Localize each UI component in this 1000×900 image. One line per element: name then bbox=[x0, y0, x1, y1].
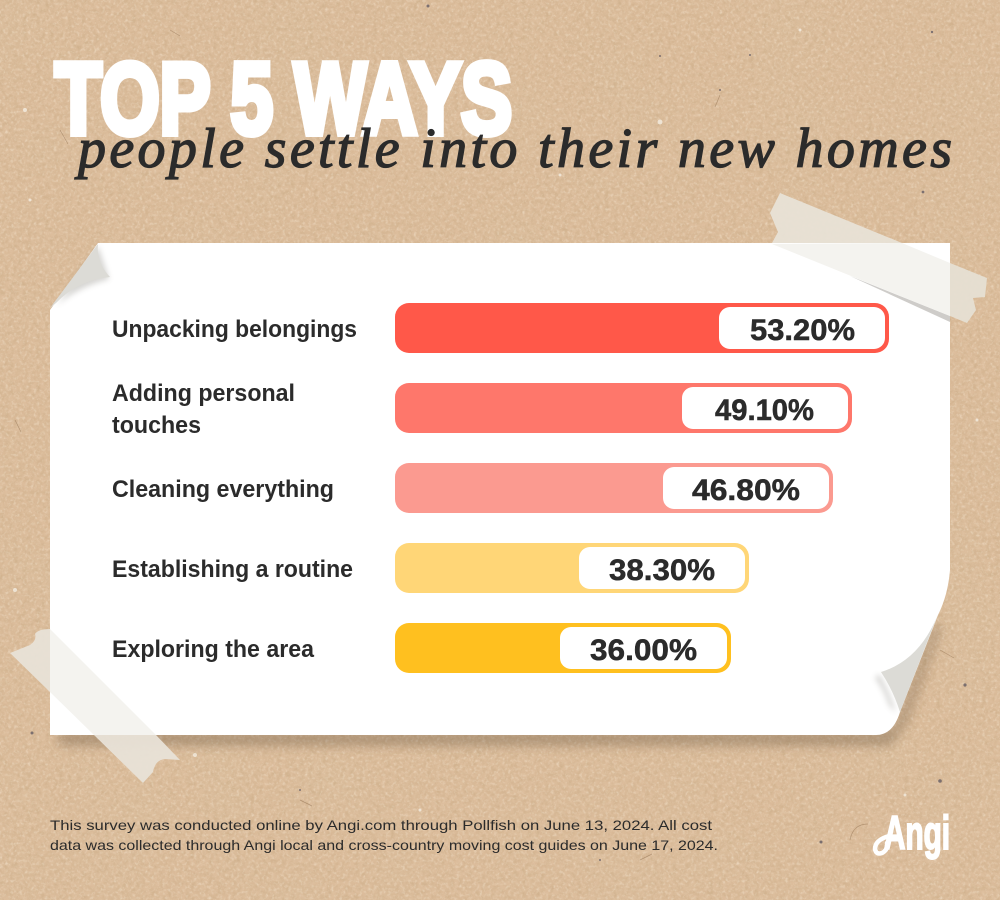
logo: Angi bbox=[875, 806, 950, 859]
bar: 36.00%: 36.00% bbox=[590, 634, 697, 667]
footnote bbox=[50, 817, 718, 853]
bar: 53.20%: 53.20% bbox=[750, 314, 855, 347]
label: Cleaning everything: Cleaning everything bbox=[112, 476, 334, 503]
paper shadow bbox=[56, 622, 940, 744]
title: TOP 5 WAYS: TOP 5 WAYS bbox=[55, 44, 512, 156]
label: Adding personal touches: Adding personal bbox=[112, 380, 295, 407]
label: Unpacking belongings: Unpacking belongings bbox=[112, 316, 357, 343]
footnote: This survey was conducted online by Angi.com through Pollfish on June 13, 2024. All cost bbox=[50, 817, 712, 833]
label: Adding personal touches: touches bbox=[112, 412, 201, 439]
bar: 38.30% bbox=[395, 543, 749, 593]
curl: top left corner bbox=[50, 244, 110, 308]
label: Adding personal touches bbox=[112, 380, 295, 439]
logo: Angi: Angi bbox=[884, 806, 950, 859]
bar: 49.10%: 49.10% bbox=[715, 394, 814, 427]
bar: 49.10% bbox=[395, 383, 852, 433]
white paper sheet bbox=[50, 243, 950, 735]
subtitle: people settle into their new homes: people settle into their new homes bbox=[74, 118, 952, 180]
bar: 36.00% bbox=[395, 623, 731, 673]
footnote: data was collected through Angi local and cross-country moving cost guides on June 17, 2024. bbox=[50, 837, 718, 853]
tape: top right bbox=[770, 193, 987, 323]
bar: 46.80% bbox=[395, 463, 833, 513]
bar: 38.30%: 38.30% bbox=[609, 554, 715, 587]
label: Exploring the area: Exploring the area bbox=[112, 636, 315, 663]
label: Establishing a routine: Establishing a routine bbox=[112, 556, 353, 583]
bar: 46.80%: 46.80% bbox=[692, 474, 800, 507]
curl: bottom right corner bbox=[875, 614, 938, 713]
tape: bottom left bbox=[10, 629, 180, 783]
bar: 53.20% bbox=[395, 303, 889, 353]
